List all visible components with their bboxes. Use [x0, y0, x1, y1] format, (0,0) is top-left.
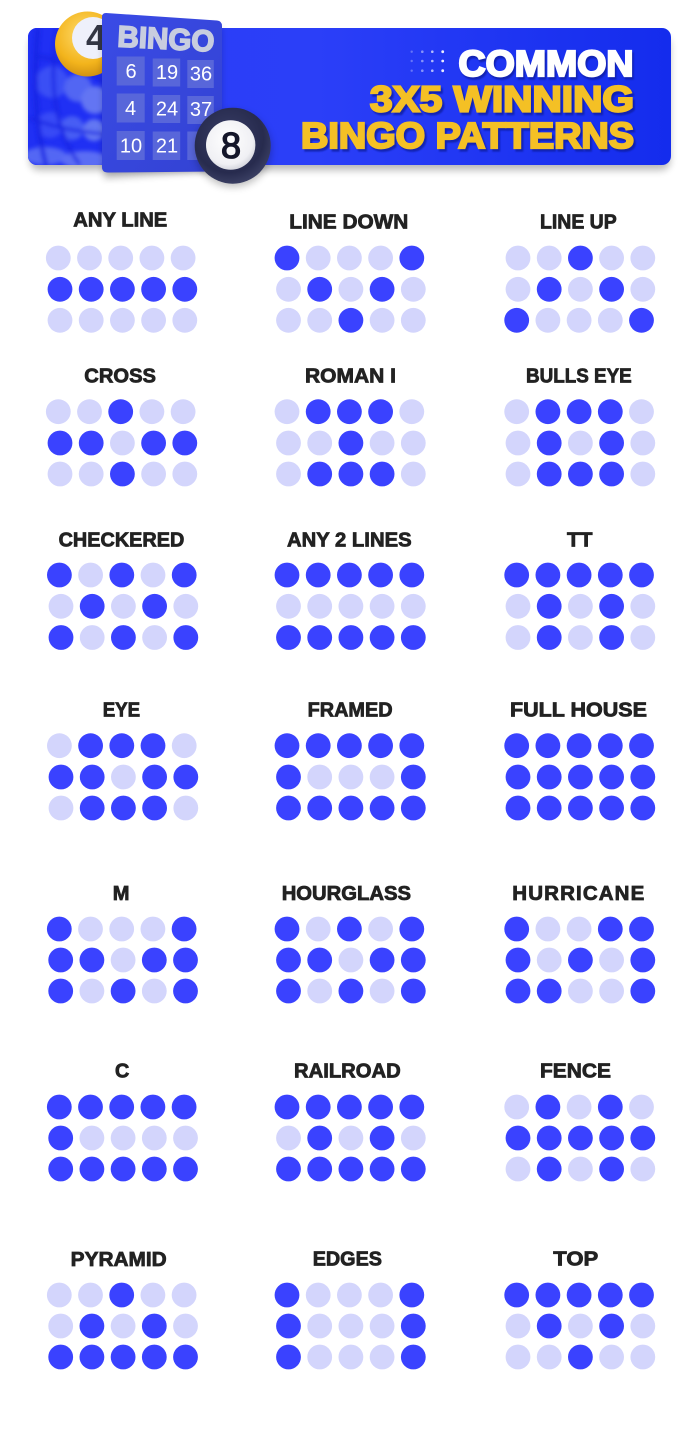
- label: HURRICANE: [512, 882, 644, 905]
- dots: [275, 563, 426, 650]
- card numbers: 36: [190, 64, 212, 86]
- pattern: pyramid: [47, 1248, 198, 1369]
- pattern: railroad: [275, 1059, 426, 1181]
- pattern: bulls eye: [504, 365, 655, 486]
- dots: [46, 399, 197, 486]
- title shadows: BINGO PATTERNS: [303, 118, 636, 158]
- title line: common: COMMON: [458, 43, 634, 84]
- label: EDGES: [313, 1248, 382, 1271]
- label: EYE: [103, 699, 140, 722]
- card body: [102, 13, 222, 172]
- pattern: hurricane: [504, 882, 655, 1003]
- card numbers: 10: [120, 136, 142, 158]
- icon: black ball number 8: [195, 108, 271, 187]
- pattern: full house: [504, 699, 655, 820]
- dotted decoration: [410, 50, 444, 72]
- label: ANY 2 LINES: [287, 529, 412, 552]
- dots: [504, 1095, 655, 1181]
- label: FULL HOUSE: [510, 699, 647, 722]
- dots: [504, 1283, 655, 1369]
- card numbers: 6: [125, 61, 137, 83]
- pattern: hourglass: [275, 882, 426, 1003]
- title shadows: COMMON: [460, 46, 635, 86]
- pattern: line down: [275, 210, 426, 333]
- pattern: cross: [46, 365, 197, 486]
- pattern: line up: [504, 210, 655, 333]
- pattern: checkered: [47, 529, 198, 650]
- label: RAILROAD: [294, 1059, 401, 1082]
- banner shadow: [30, 36, 670, 170]
- icon: bingo card: [102, 13, 222, 178]
- title shadows: [303, 46, 636, 158]
- card numbers: 24: [156, 98, 178, 120]
- icon: yellow ball number 4: [55, 12, 120, 76]
- card numbers: 19: [156, 62, 178, 84]
- header banner: [23, 28, 671, 170]
- card numbers: 4: [125, 98, 136, 120]
- label: ROMAN I: [305, 365, 396, 388]
- label: FENCE: [540, 1059, 611, 1082]
- pattern: eye: [47, 699, 198, 820]
- dots: [504, 917, 655, 1003]
- pattern: m: [47, 882, 198, 1003]
- card numbers: [120, 61, 212, 158]
- pattern: framed: [275, 699, 426, 820]
- title: [301, 43, 636, 158]
- dots: [275, 733, 426, 820]
- label: HOURGLASS: [282, 882, 411, 905]
- label: LINE UP: [540, 210, 617, 233]
- banner background: [28, 28, 671, 165]
- label: BULLS EYE: [526, 365, 632, 388]
- dots: [275, 399, 426, 486]
- pattern: edges: [275, 1248, 426, 1369]
- label: TT: [567, 529, 593, 552]
- card heading: BINGO: [117, 21, 215, 59]
- title line: bingo patterns: BINGO PATTERNS: [301, 115, 634, 156]
- pattern: c: [47, 1059, 198, 1181]
- dots: [46, 246, 197, 333]
- label: TOP: [553, 1248, 598, 1271]
- label: C: [115, 1059, 129, 1082]
- card numbers: 37: [190, 99, 212, 121]
- label: FRAMED: [308, 699, 393, 722]
- card numbers: 21: [156, 136, 178, 158]
- dots: [47, 917, 198, 1003]
- pattern: fence: [504, 1059, 655, 1181]
- title line: 3x5 winning: 3X5 WINNING: [370, 78, 634, 120]
- dots: [504, 246, 655, 333]
- dots: [275, 917, 426, 1003]
- bingo cage photo: [28, 28, 102, 165]
- pattern: tt: [504, 529, 655, 650]
- card shadow: [104, 22, 220, 178]
- label: PYRAMID: [71, 1248, 167, 1271]
- dots: [47, 733, 198, 820]
- dots: [275, 1095, 426, 1181]
- icon: yellow ball number 4: 4: [86, 17, 106, 58]
- dots: [275, 1283, 426, 1369]
- pattern: any line: [46, 209, 197, 333]
- pattern: roman i: [275, 365, 426, 486]
- label: M: [113, 882, 129, 905]
- pattern: top: [504, 1248, 655, 1369]
- dots: [504, 563, 655, 650]
- label: CROSS: [84, 365, 156, 388]
- label: LINE DOWN: [289, 210, 408, 233]
- card cells: [117, 56, 214, 160]
- dots: [504, 733, 655, 820]
- dots: [275, 246, 426, 333]
- icon: black ball number 8: 8: [221, 125, 241, 166]
- pattern: any 2 lines: [275, 529, 426, 650]
- dots: [47, 1283, 198, 1369]
- dots: [504, 399, 655, 486]
- dots: [47, 563, 198, 650]
- dots: [47, 1095, 198, 1181]
- title shadows: 3X5 WINNING: [372, 81, 636, 122]
- label: CHECKERED: [59, 529, 184, 552]
- label: ANY LINE: [73, 209, 167, 232]
